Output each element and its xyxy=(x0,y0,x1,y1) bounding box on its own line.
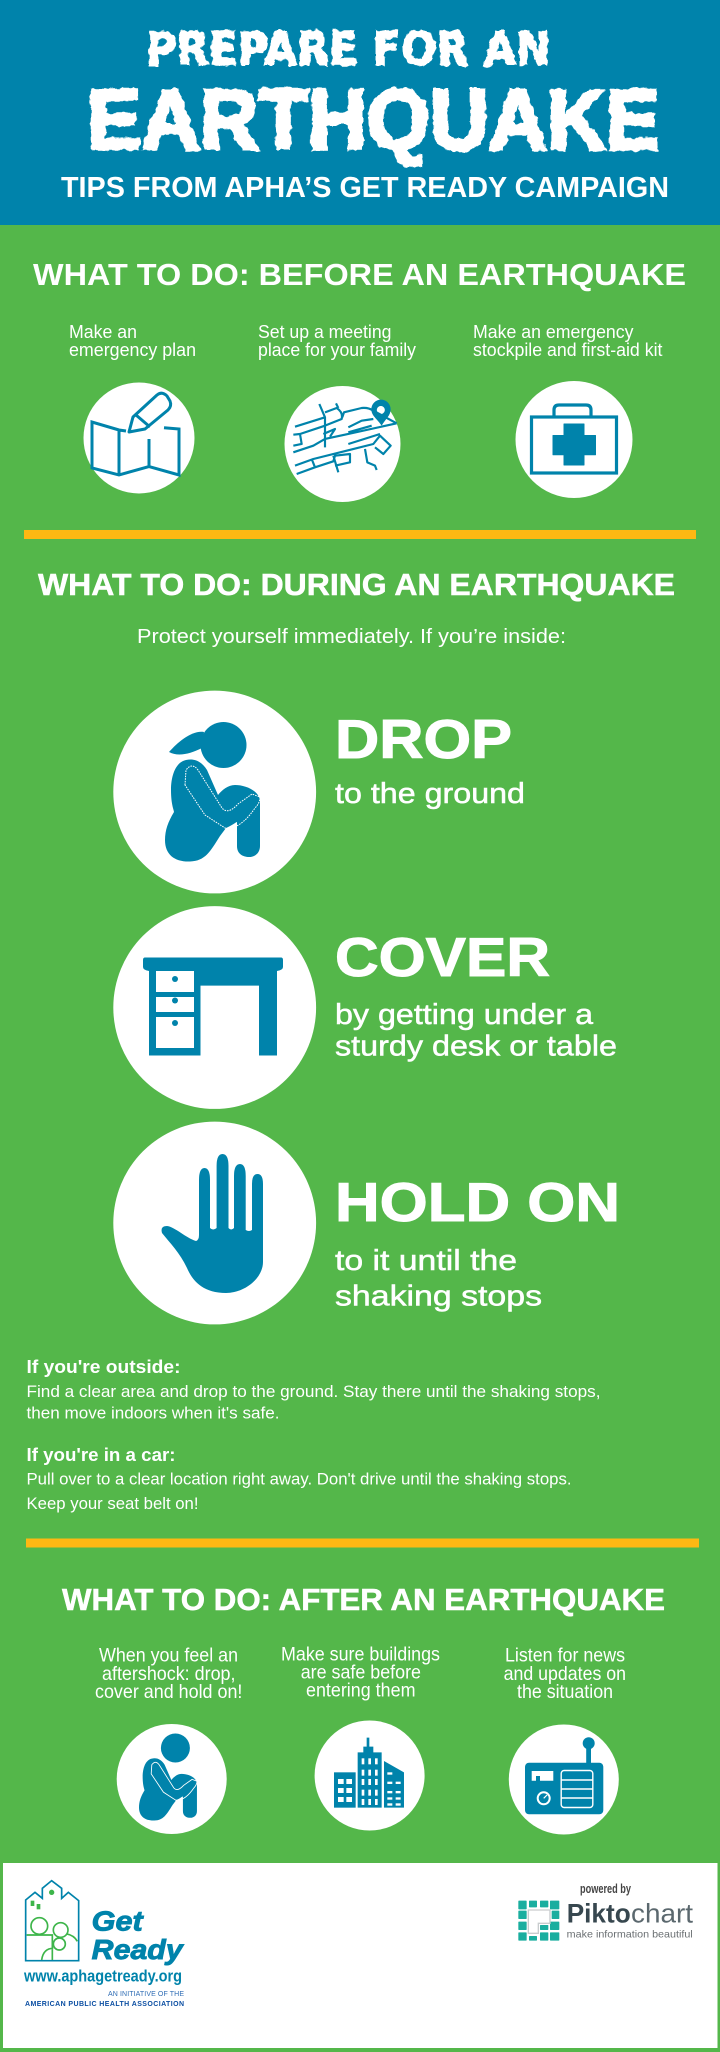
label: hold on: to it until the xyxy=(335,1245,517,1277)
tip text: news: and updates on xyxy=(504,1663,626,1685)
title line: prepare for an: PREPARE FOR AN xyxy=(146,22,551,76)
tip text: emergency plan: Make an xyxy=(69,321,137,342)
tip text: stockpile: stockpile and first-aid kit xyxy=(473,339,662,360)
icon: buildings xyxy=(315,1720,425,1830)
icon: radio xyxy=(509,1724,619,1834)
logo text: association: AMERICAN PUBLIC HEALTH ASSOCIATION xyxy=(25,2001,184,2008)
tip text: news: the situation xyxy=(517,1681,613,1703)
piktochart: logo mark xyxy=(518,1901,559,1941)
logo text: url: www.aphagetready.org xyxy=(23,1966,182,1986)
icon: map and pencil xyxy=(84,382,194,494)
section: during an earthquake xyxy=(26,567,675,1513)
piktochart: tagline: make information beautiful xyxy=(567,1929,693,1941)
tip text: emergency plan: emergency plan xyxy=(69,339,196,360)
text block: in a car: Pull over to a clear location right away. Don't drive until the shaking stops. xyxy=(26,1470,572,1488)
tip text: aftershock xyxy=(95,1644,242,1703)
title line: earthquake: EARTHQUAKE xyxy=(87,73,660,168)
heading: during: WHAT TO DO: DURING AN EARTHQUAKE xyxy=(38,567,675,602)
logo: get ready house xyxy=(26,1881,79,1961)
label: hold on: HOLD ON xyxy=(335,1171,620,1233)
piktochart: wordmark: Pikto xyxy=(567,1898,631,1928)
tip text: buildings: entering them xyxy=(306,1680,416,1702)
text block: in a car: If you're in a car: xyxy=(26,1444,176,1465)
tip text: buildings xyxy=(281,1644,440,1702)
tip text: aftershock: When you feel an xyxy=(99,1644,238,1666)
label: cover: by getting under a xyxy=(335,999,594,1031)
text block: in a car xyxy=(26,1444,572,1513)
label: cover: sturdy desk or table xyxy=(335,1030,617,1062)
label: hold on: shaking stops xyxy=(335,1280,542,1312)
text block: outside: Find a clear area and drop to the ground. Stay there until the shaking stops, xyxy=(26,1382,600,1401)
tip text: meeting place: place for your family xyxy=(258,339,417,360)
label: drop xyxy=(335,708,525,810)
tip text: meeting place: Set up a meeting xyxy=(258,321,392,342)
label: drop: to the ground xyxy=(335,778,525,810)
subtitle: TIPS FROM APHA’S GET READY CAMPAIGN xyxy=(61,172,669,204)
tip text: stockpile: Make an emergency xyxy=(473,321,634,342)
tip text: buildings: are safe before xyxy=(301,1662,421,1684)
label: cover xyxy=(335,926,617,1062)
heading: after: WHAT TO DO: AFTER AN EARTHQUAKE xyxy=(62,1582,665,1617)
piktochart: wordmark: chart xyxy=(631,1898,694,1928)
section: before an earthquake xyxy=(33,257,686,502)
icon: crouching person xyxy=(117,1724,227,1834)
footer panel xyxy=(3,1863,718,2048)
label: drop: DROP xyxy=(335,708,512,770)
logo text: initiative: AN INITIATIVE OF THE xyxy=(108,1991,184,1998)
icon: desk xyxy=(113,906,316,1109)
icon: street map with pin xyxy=(284,386,400,502)
text block: outside: then move indoors when it's safe. xyxy=(26,1404,280,1422)
tip text: news xyxy=(504,1644,626,1703)
text block: outside xyxy=(26,1356,600,1422)
icon: first aid kit xyxy=(516,381,632,498)
divider bar 2 xyxy=(26,1538,699,1548)
tip text: emergency plan xyxy=(69,321,196,360)
logo text: get ready: Ready xyxy=(92,1934,184,1965)
tip text: meeting place xyxy=(258,321,417,360)
intro text: Protect yourself immediately. If you’re inside: xyxy=(137,625,566,648)
logo text: get ready: Get xyxy=(92,1906,145,1937)
text block: in a car: Keep your seat belt on! xyxy=(26,1494,198,1513)
label: hold on xyxy=(335,1171,620,1312)
label: cover: COVER xyxy=(335,926,550,988)
icon: raised hand xyxy=(113,1122,316,1324)
divider bar 1 xyxy=(24,530,696,539)
section: after an earthquake xyxy=(62,1582,665,1834)
tip text: stockpile xyxy=(473,321,662,360)
tip text: aftershock: aftershock: drop, xyxy=(102,1663,236,1685)
heading: before: WHAT TO DO: BEFORE AN EARTHQUAKE xyxy=(33,257,686,292)
tip text: buildings: Make sure buildings xyxy=(281,1644,440,1666)
text block: outside: If you're outside: xyxy=(26,1356,180,1377)
logo text: get ready xyxy=(92,1906,184,1965)
tip text: news: Listen for news xyxy=(505,1644,625,1666)
header banner xyxy=(0,0,720,225)
tip text: aftershock: cover and hold on! xyxy=(95,1681,242,1703)
piktochart: powered by: powered by xyxy=(580,1882,631,1896)
icon: person dropping to ground xyxy=(113,691,316,893)
